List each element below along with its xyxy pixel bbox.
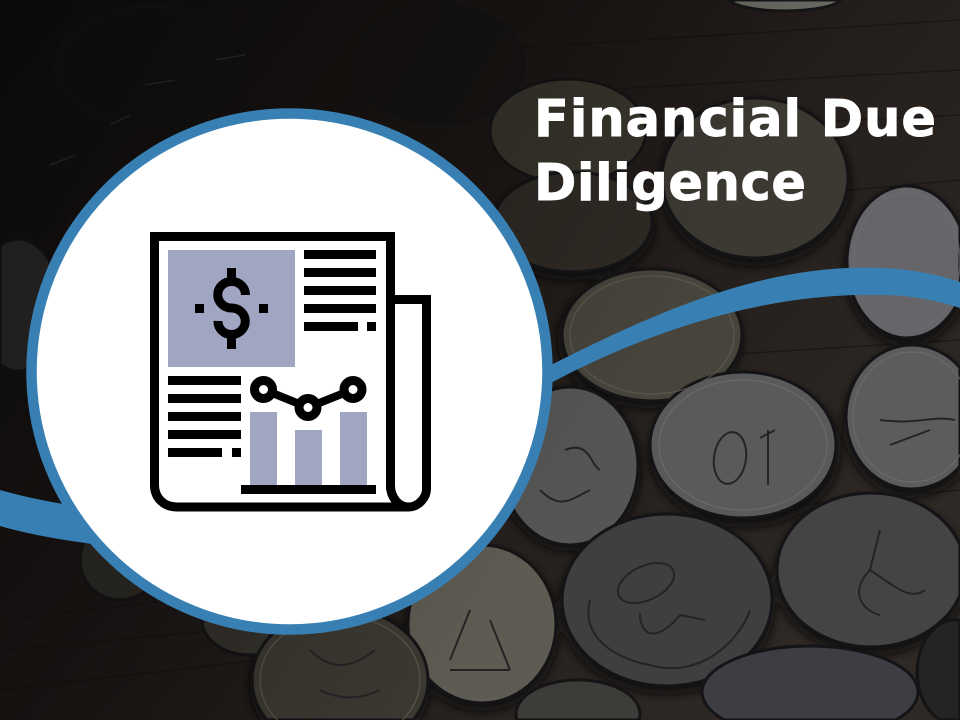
bar chart with trend line	[241, 380, 376, 494]
decorative ribbon: left segment	[0, 490, 100, 545]
decorative ribbon: right segment	[545, 268, 960, 386]
white circle with blue ring	[32, 114, 548, 630]
newspaper outline	[154, 236, 426, 507]
icon: financial newspaper	[154, 236, 426, 507]
dollar panel	[168, 250, 295, 367]
text lines: lower left	[168, 376, 241, 457]
title: Financial Due	[534, 90, 936, 149]
text lines: top right	[304, 250, 376, 331]
icon: dollar sign	[195, 268, 268, 349]
title second line: Diligence	[534, 154, 806, 213]
